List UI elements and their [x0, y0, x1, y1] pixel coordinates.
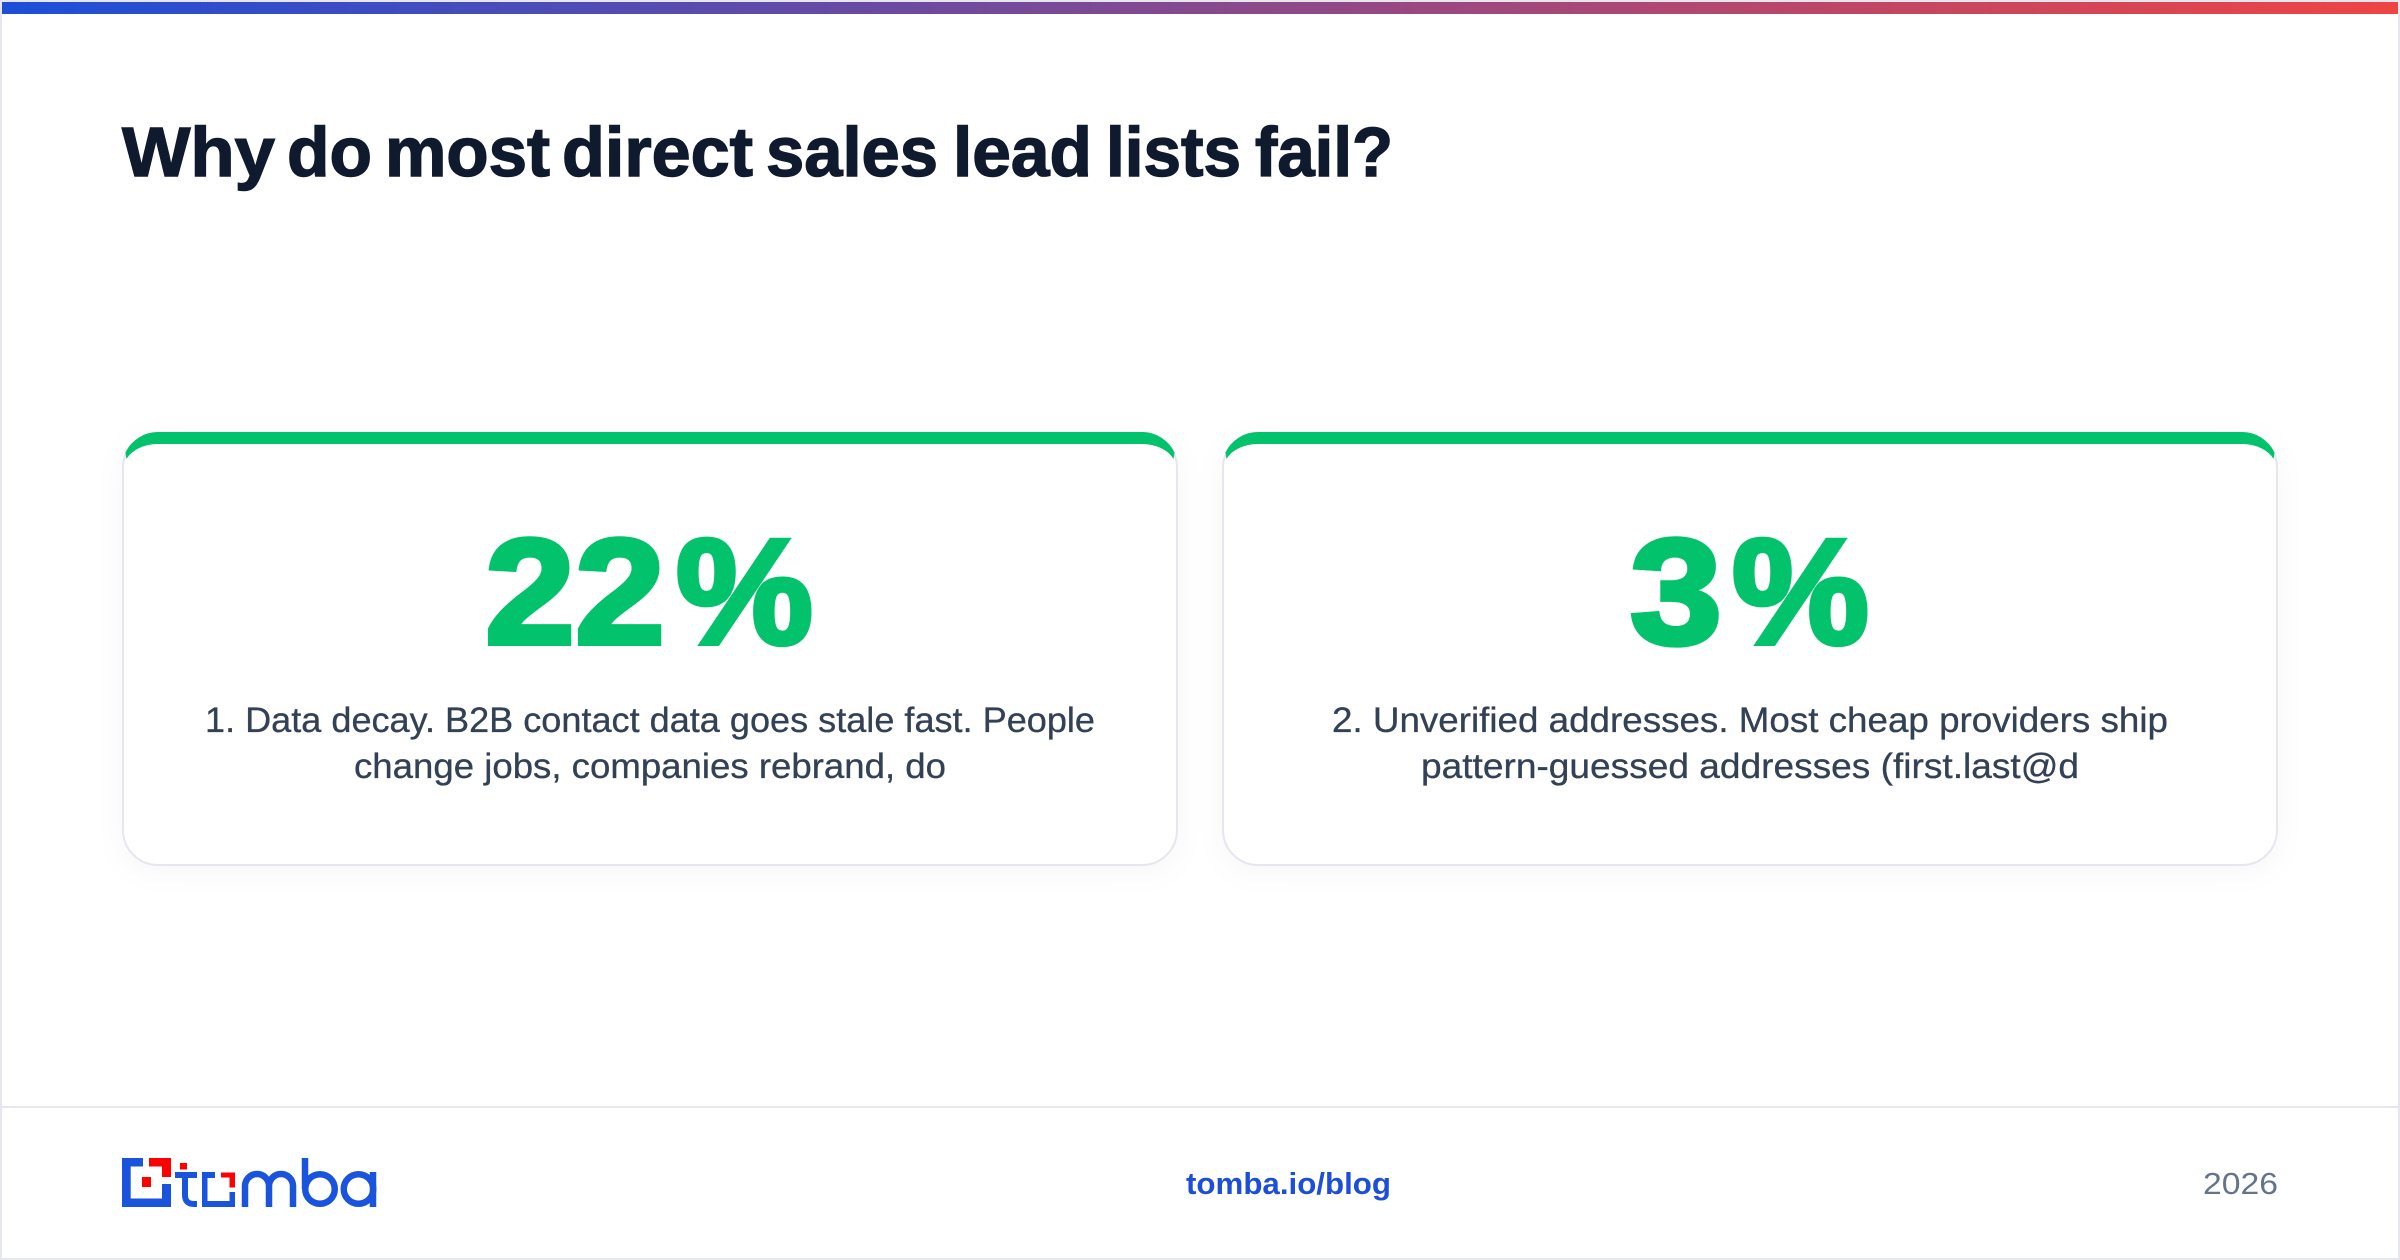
title: do: [287, 113, 372, 191]
title: sales: [766, 113, 938, 191]
description: unverified addresses: [1332, 701, 2168, 786]
title: direct: [562, 113, 753, 191]
description: unverified addresses: pattern-guessed addresses (first.last@d: [1421, 747, 2079, 786]
statistic: 3%: %: [1732, 508, 1869, 676]
title: [122, 113, 1393, 191]
title: lead: [953, 113, 1092, 191]
statistic: 3%: [1630, 508, 1869, 676]
statistic: 22%: %: [676, 508, 813, 676]
logo: tomba: [122, 1158, 373, 1207]
top gradient bar: [2, 2, 2398, 14]
title: most: [385, 113, 550, 191]
title: Why: [122, 113, 275, 191]
description: data decay: 1. Data decay. B2B contact data goes stale fast. People: [205, 701, 1095, 740]
statistic: 22%: 22: [485, 508, 665, 676]
description: unverified addresses: 2. Unverified addresses. Most cheap providers ship: [1332, 701, 2168, 740]
panel: data decay stat card: [123, 432, 1177, 865]
title: fail?: [1255, 113, 1393, 191]
statistic: 22%: [485, 508, 813, 676]
title: lists: [1106, 113, 1241, 191]
description: data decay: change jobs, companies rebrand, do: [354, 747, 946, 786]
footer year: 2026: [2203, 1166, 2278, 1201]
panel: unverified addresses stat card: [1223, 432, 2277, 865]
description: data decay: [205, 701, 1095, 786]
footer link: tomba.io/blog: [1186, 1166, 1391, 1201]
statistic: 3%: 3: [1630, 508, 1722, 676]
footer divider: [2, 1106, 2398, 1108]
